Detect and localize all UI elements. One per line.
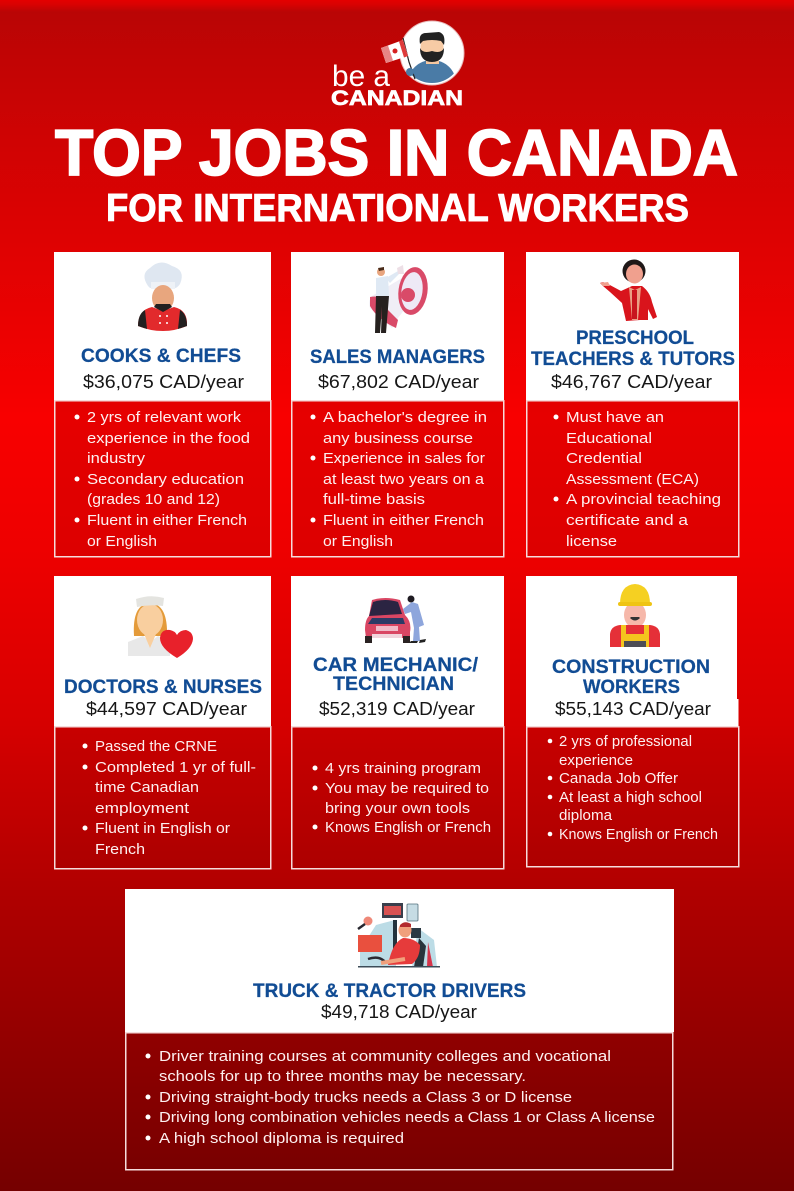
requirements list: Completed 1 yr of full- [95, 759, 256, 776]
requirements list: license [566, 533, 617, 550]
requirements list: Passed the CRNE [95, 738, 217, 755]
requirements list: Canada Job Offer [559, 771, 678, 787]
requirements box [527, 401, 739, 557]
requirements list: industry [87, 450, 146, 467]
salary: $44,597 CAD/year [86, 698, 247, 719]
logo: be a Canadian: be a [332, 60, 390, 93]
icon: teacher [600, 260, 657, 321]
requirements list: At least a high school [559, 790, 702, 806]
panel: construction workers [526, 576, 739, 867]
panel: truck and tractor drivers [125, 889, 674, 1170]
requirements list: A provincial teaching [566, 491, 721, 508]
requirements list: Fluent in English or [95, 820, 230, 837]
panel: car mechanic: TECHNICIAN [333, 673, 454, 695]
salary: $49,718 CAD/year [321, 1001, 477, 1022]
salary: $55,143 CAD/year [555, 698, 711, 719]
requirements list: any business course [323, 430, 473, 447]
requirements box [292, 401, 504, 557]
requirements list [548, 734, 718, 843]
requirements list: Secondary education [87, 471, 244, 488]
requirements list: time Canadian [95, 779, 199, 796]
icon: nurse with heart [128, 596, 193, 658]
salary: $67,802 CAD/year [318, 371, 479, 392]
requirements list: Driver training courses at community colleges and vocational [159, 1048, 611, 1065]
heading: SALES MANAGERS [310, 346, 485, 368]
title: TOP JOBS IN CANADA [55, 116, 738, 189]
requirements list: Assessment (ECA) [566, 471, 699, 488]
logo: be a Canadian: CANADIAN [331, 87, 463, 110]
requirements list: employment [95, 800, 190, 817]
requirements box [527, 727, 739, 867]
icon: truck driver [358, 903, 440, 968]
icon: salesman with megaphone [369, 265, 431, 333]
salary: $46,767 CAD/year [551, 371, 712, 392]
requirements list: French [95, 841, 145, 858]
requirements list: Knows English or French [559, 827, 718, 843]
requirements list: Fluent in either French [87, 512, 247, 529]
icon: car and mechanic [365, 596, 426, 643]
requirements box [55, 401, 271, 557]
panel: doctors and nurses [54, 576, 271, 869]
requirements list: 2 yrs of professional [559, 734, 692, 750]
icon: construction worker [610, 584, 660, 647]
requirements list: experience [559, 753, 633, 769]
panel: preschool teachers and tutors [526, 252, 739, 557]
requirements list: A high school diploma is required [159, 1130, 404, 1147]
requirements box [292, 727, 504, 869]
requirements list [146, 1048, 655, 1147]
requirements list: Credential [566, 450, 642, 467]
requirements list: certificate and a [566, 512, 689, 529]
title: FOR INTERNATIONAL WORKERS [106, 187, 689, 230]
requirements list: Knows English or French [325, 819, 491, 836]
heading: DOCTORS & NURSES [64, 676, 262, 698]
panel: cooks and chefs [54, 252, 271, 557]
salary: $52,319 CAD/year [319, 698, 475, 719]
requirements list [554, 409, 721, 550]
requirements list: Educational [566, 430, 652, 447]
salary: $36,075 CAD/year [83, 371, 244, 392]
requirements list: Experience in sales for [323, 450, 485, 467]
heading: COOKS & CHEFS [81, 345, 241, 367]
heading: TRUCK & TRACTOR DRIVERS [253, 980, 526, 1002]
icon: chef [138, 262, 187, 331]
requirements list: You may be required to [325, 780, 489, 797]
heading: CAR MECHANIC/ [313, 654, 479, 676]
requirements list: full-time basis [323, 491, 425, 508]
requirements list: or English [323, 533, 393, 550]
requirements list: at least two years on a [323, 471, 485, 488]
requirements list: Must have an [566, 409, 664, 426]
requirements list: schools for up to three months may be necessary. [159, 1068, 526, 1085]
requirements list: (grades 10 and 12) [87, 491, 220, 508]
panel: sales managers [291, 252, 504, 557]
panel: construction workers: WORKERS [583, 676, 680, 698]
panel: car mechanic [291, 576, 504, 869]
title [55, 116, 738, 230]
requirements list [312, 760, 491, 836]
requirements list: bring your own tools [325, 800, 470, 817]
requirements list: Driving straight-body trucks needs a Class 3 or D license [159, 1089, 572, 1106]
requirements list: 2 yrs of relevant work [87, 409, 242, 426]
requirements list: or English [87, 533, 157, 550]
requirements list [74, 409, 250, 550]
requirements list: experience in the food [87, 430, 250, 447]
heading: CONSTRUCTION [552, 656, 710, 678]
panel: preschool teachers and tutors: TEACHERS & TUTORS [531, 348, 735, 370]
heading: PRESCHOOL [576, 327, 694, 349]
requirements list [82, 738, 256, 858]
requirements box [55, 727, 271, 869]
requirements list: A bachelor's degree in [323, 409, 487, 426]
requirements box [126, 1033, 673, 1170]
logo: be a Canadian [331, 21, 464, 110]
requirements list: diploma [559, 808, 613, 824]
requirements list: Fluent in either French [323, 512, 484, 529]
requirements list: 4 yrs training program [325, 760, 481, 777]
requirements list: Driving long combination vehicles needs a Class 1 or Class A license [159, 1109, 655, 1126]
requirements list [310, 409, 487, 550]
